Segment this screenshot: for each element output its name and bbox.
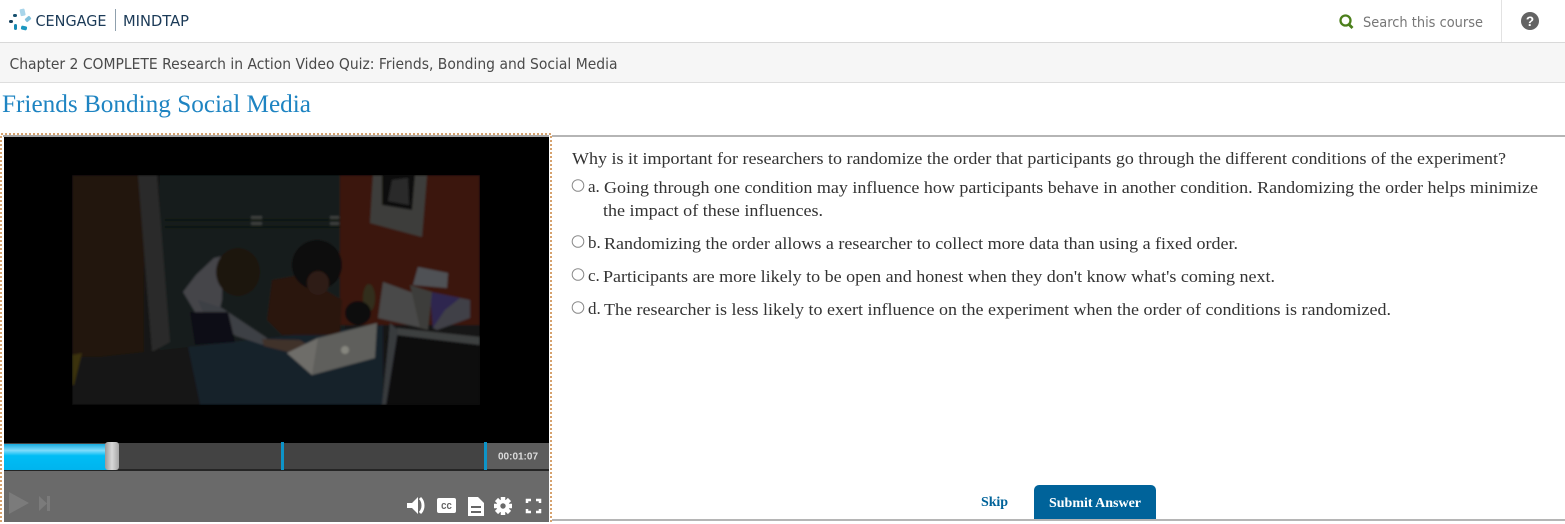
option b: b. <box>588 233 601 252</box>
left woman <box>183 256 223 322</box>
question panel <box>552 135 1565 521</box>
timestamp: 00:01:07 <box>498 452 538 462</box>
option a <box>572 177 1538 220</box>
skip link: Skip <box>981 495 1008 510</box>
laptop <box>311 322 379 376</box>
option a: Going through one condition may influence how participants behave in another condition. Randomizing the order helps minimize <box>604 178 1538 197</box>
scrubber handle <box>105 442 119 470</box>
chapter title bar: Chapter 2 COMPLETE Research in Action Video Quiz: Friends, Bonding and Social Media <box>10 55 618 73</box>
icon: play <box>9 492 29 514</box>
search placeholder: Search this course <box>1363 15 1483 31</box>
option c: Participants are more likely to be open and honest when they don't know what's coming next. <box>603 267 1275 286</box>
submit button: Submit Answer <box>1049 496 1141 511</box>
logo text: Cengage: CENGAGE <box>36 12 106 30</box>
icon: settings <box>494 497 512 515</box>
icon: next <box>39 496 50 511</box>
monitor <box>384 333 480 405</box>
chapter title bar <box>0 43 1565 83</box>
right woman <box>267 275 342 335</box>
option a: the impact of these influences. <box>603 201 823 220</box>
logo text: MindTap: MINDTAP <box>123 12 189 30</box>
chapter markers <box>281 442 487 470</box>
submit button <box>1034 485 1156 519</box>
icon: closed captions <box>437 498 456 513</box>
question text: Why is it important for researchers to randomize the order that participants go through the different conditions of the experiment? <box>572 149 1506 168</box>
icon: help <box>1521 12 1539 30</box>
icon: fullscreen <box>527 500 540 512</box>
top navigation bar <box>0 0 1565 43</box>
progress bar <box>4 442 549 471</box>
video player <box>1 134 551 524</box>
option d: The researcher is less likely to exert influence on the experiment when the order of conditions is randomized. <box>604 300 1391 319</box>
option a: a. <box>588 177 600 196</box>
icon: Cengage logo <box>9 8 32 31</box>
option d: d. <box>588 299 601 318</box>
icon: closed captions: CC <box>441 502 452 512</box>
option c: c. <box>588 266 600 285</box>
heading: Friends Bonding Social Media <box>2 89 311 118</box>
icon: help: ? <box>1526 14 1534 29</box>
icon: volume <box>407 497 423 514</box>
books on the shelf <box>378 282 427 328</box>
video frame: two women at a laptop <box>72 175 480 405</box>
control bar <box>4 471 549 522</box>
option b: Randomizing the order allows a researcher to collect more data than using a fixed order. <box>604 234 1238 253</box>
desk <box>188 325 383 405</box>
icon: transcript <box>468 497 484 516</box>
icon: search <box>1340 16 1352 28</box>
